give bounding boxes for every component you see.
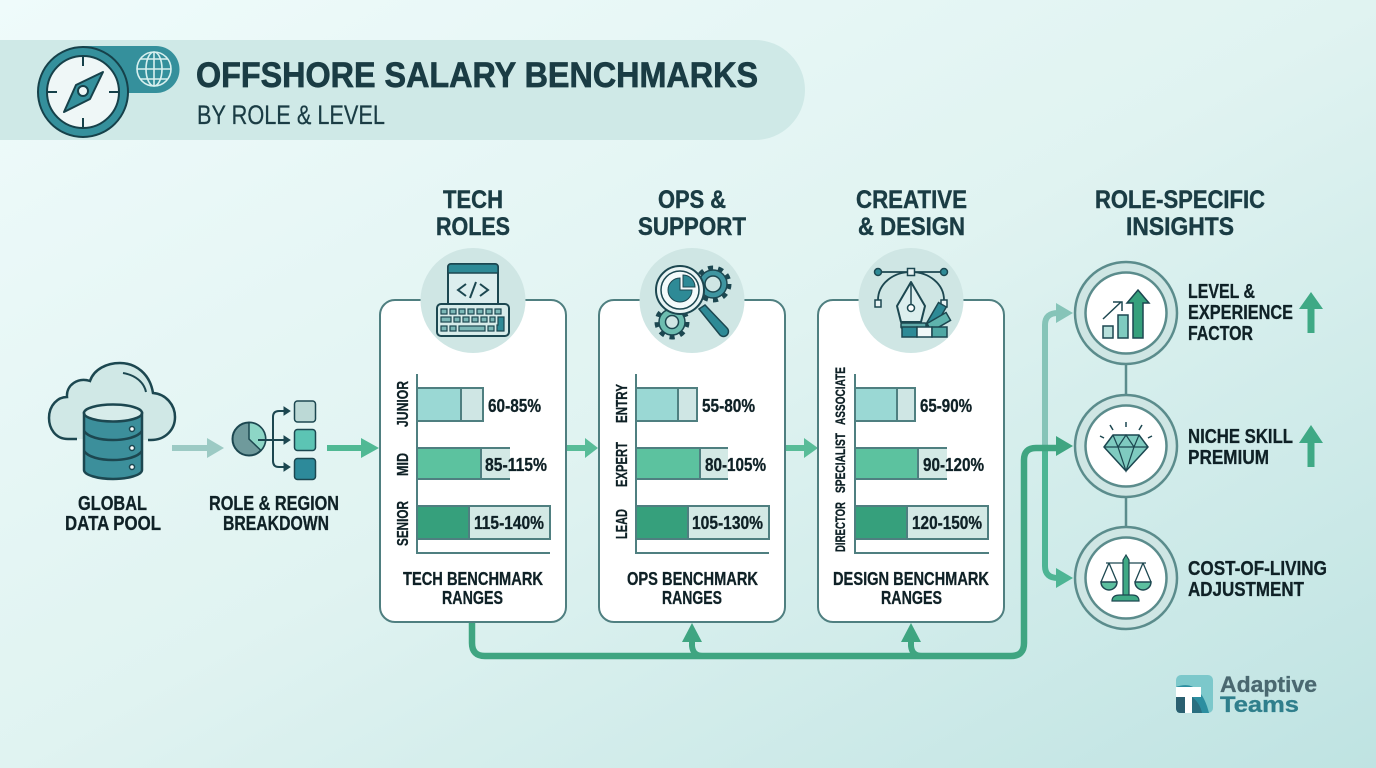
subtitle: BY ROLE & LEVEL	[197, 100, 385, 130]
card	[599, 300, 785, 622]
level labels	[395, 381, 412, 546]
label: NICHE SKILL	[1188, 426, 1293, 448]
level labels	[614, 384, 631, 539]
bar chart: ops benchmark	[614, 374, 769, 553]
feedback arrows along the bottom	[472, 436, 1073, 656]
bar: junior	[417, 388, 483, 421]
logo wordmark: Adaptive	[1220, 672, 1317, 697]
arrow: breakdown to tech roles	[327, 438, 379, 458]
heading: creative and design	[856, 186, 967, 241]
level labels: LEAD	[614, 509, 631, 539]
label: ADJUSTMENT	[1188, 579, 1304, 601]
label: role and region breakdown: BREAKDOWN	[223, 513, 329, 535]
caption: design benchmark ranges	[833, 568, 990, 608]
label: LEVEL &	[1188, 281, 1255, 303]
range values: 65-90%	[920, 396, 972, 416]
label: PREMIUM	[1188, 447, 1269, 469]
heading: creative and design: & DESIGN	[858, 213, 965, 241]
heading: role-specific insights: INSIGHTS	[1126, 213, 1234, 241]
range values: 115-140%	[474, 513, 544, 533]
label: FACTOR	[1188, 323, 1253, 345]
bar chart: design benchmark	[833, 367, 989, 553]
logo mark	[1176, 675, 1213, 713]
bar: senior	[417, 506, 550, 539]
card	[380, 300, 566, 622]
bar: associate	[855, 388, 915, 421]
logo wordmark	[1220, 672, 1317, 717]
bar: expert	[636, 448, 728, 479]
level labels: DIRECTOR	[833, 502, 848, 552]
level labels: MID	[395, 453, 412, 476]
label	[1188, 281, 1293, 345]
range values	[474, 396, 547, 533]
icon: magnifier and gears	[640, 248, 744, 353]
panel: ops and support	[599, 186, 785, 622]
range values: 85-115%	[485, 455, 547, 475]
caption: ops benchmark ranges: OPS BENCHMARK	[627, 568, 759, 589]
caption: design benchmark ranges: RANGES	[881, 587, 942, 608]
insight: cost of living	[1075, 527, 1327, 629]
label: EXPERIENCE	[1188, 302, 1293, 324]
level labels: EXPERT	[614, 442, 631, 487]
icon: up arrow	[1299, 425, 1323, 467]
header band shape	[0, 40, 805, 140]
bar: lead	[636, 506, 769, 539]
logo wordmark: Teams	[1220, 692, 1299, 717]
label: global data pool: GLOBAL	[78, 493, 147, 515]
range values: 105-130%	[692, 513, 763, 533]
level labels	[833, 367, 848, 552]
range values: 120-150%	[912, 513, 982, 533]
bar: specialist	[855, 448, 947, 479]
header band	[0, 40, 805, 140]
range values: 80-105%	[705, 455, 766, 475]
heading: tech roles	[436, 186, 510, 241]
heading: creative and design: CREATIVE	[856, 186, 967, 214]
caption: ops benchmark ranges: RANGES	[662, 587, 722, 608]
caption: tech benchmark ranges: RANGES	[442, 587, 503, 608]
range values	[692, 396, 766, 533]
heading: tech roles: ROLES	[436, 213, 510, 241]
bar: mid	[417, 448, 510, 479]
card	[818, 300, 1004, 622]
icon: balance scale	[1075, 527, 1177, 629]
icon: cloud database	[49, 363, 175, 479]
icon: up arrow	[1299, 292, 1323, 333]
bar: entry	[636, 388, 697, 421]
connector lines between insights	[1125, 364, 1127, 527]
arrow: tech to ops	[566, 438, 598, 458]
range values: 90-120%	[923, 455, 984, 475]
level labels: ENTRY	[614, 384, 631, 423]
logo: adaptive teams	[1176, 672, 1317, 717]
level labels: SENIOR	[395, 501, 412, 546]
level labels: JUNIOR	[395, 381, 412, 427]
panel: creative and design	[818, 186, 1004, 622]
insight: niche skill premium	[1075, 395, 1323, 497]
icon: growth chart	[1075, 262, 1177, 364]
label	[1188, 426, 1293, 469]
heading: ops and support	[638, 186, 746, 241]
range values	[912, 396, 984, 533]
icon: compass	[38, 47, 128, 137]
arrow: down to cost of living	[1045, 448, 1073, 588]
label: COST-OF-LIVING	[1188, 558, 1327, 580]
level labels: SPECIALIST	[833, 432, 848, 493]
heading: role-specific insights	[1095, 186, 1265, 241]
icon: role and region breakdown	[232, 401, 316, 480]
arrow: up to level factor	[1045, 303, 1073, 448]
caption: tech benchmark ranges	[403, 568, 543, 608]
arrow: ops to creative	[785, 438, 818, 458]
label: global data pool: DATA POOL	[65, 513, 161, 535]
arrow: data pool to breakdown	[172, 438, 224, 458]
heading: ops and support: SUPPORT	[638, 213, 746, 241]
bar chart: tech benchmark	[395, 374, 550, 553]
heading: ops and support: OPS &	[658, 186, 726, 214]
caption: design benchmark ranges: DESIGN BENCHMARK	[833, 568, 990, 589]
icon: globe pill	[83, 46, 179, 93]
title: OFFSHORE SALARY BENCHMARKS	[196, 56, 758, 95]
caption: ops benchmark ranges	[627, 568, 759, 608]
icon: diamond	[1075, 395, 1177, 497]
caption: tech benchmark ranges: TECH BENCHMARK	[403, 568, 543, 589]
icon: pen tool and swatches	[858, 248, 964, 353]
heading: tech roles: TECH	[443, 186, 503, 214]
icon: code window and keyboard	[420, 248, 526, 353]
insight: level and experience	[1075, 262, 1323, 364]
label: role and region breakdown	[209, 493, 339, 535]
level labels: ASSOCIATE	[833, 367, 848, 425]
label: role and region breakdown: ROLE & REGION	[209, 493, 339, 515]
range values: 55-80%	[702, 396, 755, 416]
range values: 60-85%	[488, 396, 541, 416]
panel: tech roles	[380, 186, 566, 622]
label	[1188, 558, 1327, 601]
label: global data pool	[65, 493, 161, 535]
bar: director	[855, 506, 988, 539]
heading: role-specific insights: ROLE-SPECIFIC	[1095, 186, 1265, 214]
